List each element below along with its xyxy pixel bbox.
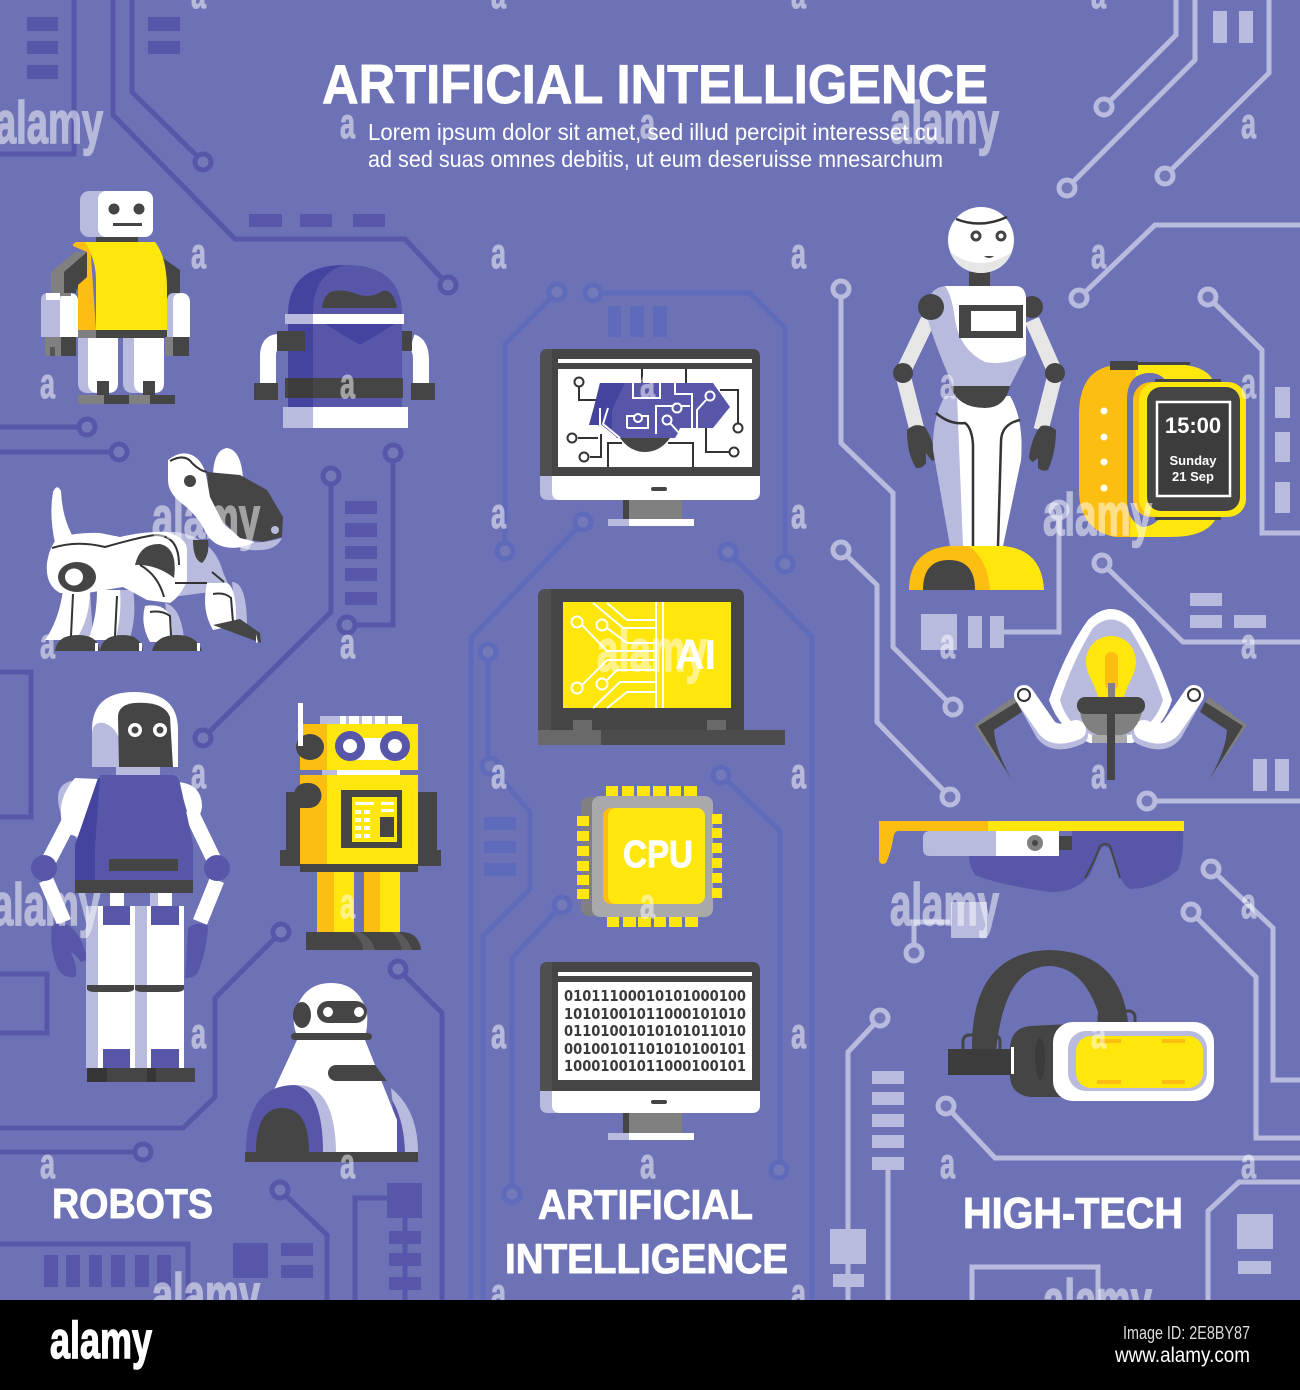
watermarks: a <box>791 1270 807 1318</box>
watermarks: a <box>340 100 356 148</box>
VR headset <box>948 950 1214 1101</box>
watermarks: alamy <box>152 1262 260 1328</box>
watermarks: a <box>940 1140 956 1188</box>
watermarks: a <box>940 620 956 668</box>
robot: dog <box>45 448 283 651</box>
label: artificial intelligence: INTELLIGENCE <box>505 1235 788 1282</box>
smartwatch <box>1079 361 1246 537</box>
title: ARTIFICIAL INTELLIGENCE <box>322 53 988 115</box>
monitor: binary code <box>540 962 760 1140</box>
watermarks: a <box>491 1010 507 1058</box>
footer logo: alamy <box>50 1312 152 1370</box>
brain chip <box>568 369 742 467</box>
smartwatch: 15:00 <box>1165 413 1221 438</box>
watermarks: a <box>791 1010 807 1058</box>
watermarks: a <box>791 230 807 278</box>
watermarks: a <box>340 360 356 408</box>
watermarks: a <box>40 360 56 408</box>
watermarks: alamy <box>890 90 999 156</box>
watermarks: a <box>491 230 507 278</box>
head <box>92 692 178 767</box>
watermarks: a <box>491 750 507 798</box>
watermarks: a <box>640 100 656 148</box>
watermarks: a <box>1091 230 1107 278</box>
CPU chip <box>577 786 722 927</box>
subtitle text <box>368 119 943 172</box>
robot: purple dome <box>254 265 435 428</box>
watermarks: a <box>640 1140 656 1188</box>
monitor: binary code: 01101001010101011010 <box>564 1022 746 1040</box>
watermarks: alamy <box>1043 1268 1152 1334</box>
robot: boxy yellow <box>41 191 190 404</box>
footer bar <box>0 1300 1300 1390</box>
website: www.alamy.com <box>1114 1344 1250 1367</box>
watermarks: a <box>940 360 956 408</box>
watermarks: alamy <box>1043 482 1152 548</box>
label: artificial intelligence <box>505 1181 788 1282</box>
watermarks: a <box>1241 1140 1257 1188</box>
watermarks: a <box>491 490 507 538</box>
head <box>948 207 1014 273</box>
label: artificial intelligence: ARTIFICIAL <box>538 1181 753 1228</box>
watermarks: a <box>1091 750 1107 798</box>
watermarks: alamy <box>152 485 260 551</box>
watermarks: a <box>640 880 656 928</box>
watermarks: a <box>40 620 56 668</box>
smartwatch: Sunday <box>1170 453 1217 468</box>
watermarks: a <box>1091 1010 1107 1058</box>
watermarks: a <box>1241 100 1257 148</box>
head <box>80 191 153 242</box>
smart glasses <box>879 821 1184 892</box>
subtitle text: ad sed suas omnes debitis, ut eum deseruisse mnesarchum <box>368 146 943 172</box>
monitor: binary code: 00100101101010100101 <box>564 1040 746 1058</box>
watermarks: a <box>340 1140 356 1188</box>
watermarks: a <box>1241 880 1257 928</box>
robot: purple vest <box>31 692 230 1082</box>
watermarks: a <box>191 230 207 278</box>
monitor: circuit brain <box>540 349 760 526</box>
watermarks: alamy <box>597 618 707 684</box>
CPU chip: CPU <box>623 834 693 876</box>
watermarks: a <box>791 490 807 538</box>
watermarks: a <box>340 880 356 928</box>
watermarks: a <box>640 360 656 408</box>
monitor: binary code: 01011100010101000100 <box>564 987 746 1005</box>
smartwatch: 21 Sep <box>1172 469 1214 484</box>
label: high-tech: HIGH-TECH <box>963 1189 1183 1238</box>
watermarks: alamy <box>890 872 999 938</box>
watermarks: a <box>491 1270 507 1318</box>
watermarks: a <box>340 620 356 668</box>
image id: Image ID: 2E8BY87 <box>1123 1323 1250 1343</box>
robot: dome wheel <box>245 983 418 1162</box>
subtitle text: Lorem ipsum dolor sit amet, sed illud percipit interesset cu <box>368 119 938 145</box>
watermarks: a <box>791 750 807 798</box>
bulb drone <box>974 609 1247 780</box>
watermarks: a <box>1241 360 1257 408</box>
humanoid robot on yellow base <box>893 207 1065 590</box>
laptop: AI screen <box>538 589 785 745</box>
monitor: binary code: 10001001011000100101 <box>564 1057 746 1075</box>
laptop: AI screen: AI <box>675 631 716 678</box>
robot: yellow with antenna <box>280 703 441 950</box>
label: robots: ROBOTS <box>52 1180 213 1227</box>
watermarks: a <box>40 1140 56 1188</box>
watermarks: a <box>1241 620 1257 668</box>
watermarks: alamy <box>0 90 103 156</box>
monitor: binary code: 10101001011000101010 <box>564 1005 746 1023</box>
watermarks: a <box>191 750 207 798</box>
watermarks: a <box>191 1010 207 1058</box>
